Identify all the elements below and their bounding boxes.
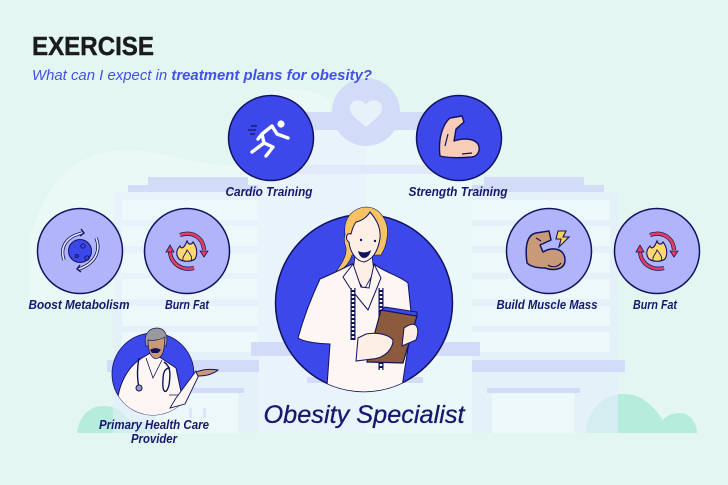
subtitle: What can I expect in treatment plans for obesity? [32, 67, 372, 84]
icon: build muscle mass [506, 208, 592, 294]
neck and face [353, 256, 374, 290]
illustration: obesity specialist [276, 207, 452, 400]
shirt and collar [361, 289, 376, 306]
label: Boost Metabolism [28, 298, 130, 312]
coat [298, 264, 412, 400]
hospital building backdrop [107, 78, 625, 433]
icon: strength training [416, 96, 502, 180]
hair [335, 207, 388, 273]
label: Cardio Training [226, 185, 313, 199]
illustration: primary health care provider [112, 328, 218, 420]
book [367, 310, 417, 363]
label: Build Muscle Mass [496, 298, 598, 312]
icon: burn fat right [614, 208, 700, 294]
label: Burn Fat [165, 298, 210, 312]
bushes [77, 394, 697, 433]
label: obesity specialist: Obesity Specialist [264, 401, 466, 429]
icon: boost metabolism [38, 208, 122, 294]
icon: burn fat left [144, 208, 230, 294]
title: EXERCISE [32, 33, 154, 61]
icon: cardio training [228, 96, 314, 180]
measuring tape [353, 288, 381, 370]
background clouds [30, 89, 330, 300]
label line 2: Provider [131, 432, 178, 446]
label: primary health care provider: Primary Health Care [99, 418, 209, 432]
hands [356, 333, 393, 361]
label: Strength Training [408, 185, 508, 199]
label: Burn Fat [633, 298, 678, 312]
